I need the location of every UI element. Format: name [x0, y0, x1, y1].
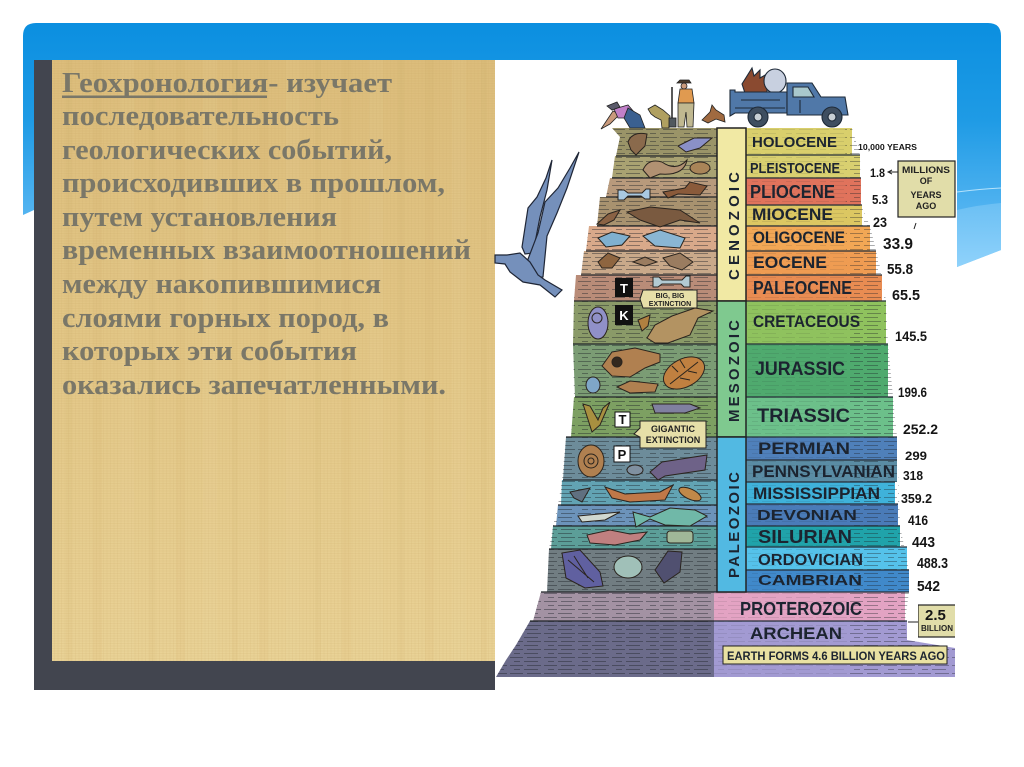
chart: geologic column, fossil side: [496, 128, 717, 677]
text block: geochronology definition: между накопившимися: [62, 269, 381, 300]
age numbers: 318: [903, 468, 923, 483]
age numbers: 359.2: [901, 491, 932, 506]
callout: 2.5 billion: [908, 605, 963, 637]
period labels: EOCENE: [753, 254, 827, 272]
callout: millions of years ago: AGO: [916, 201, 936, 211]
callout: gigantic extinction: [634, 421, 706, 448]
period labels: HOLOCENE: [752, 134, 837, 151]
age numbers: 416: [908, 512, 928, 528]
period labels: ORDOVICIAN: [758, 552, 863, 569]
period labels: [740, 134, 895, 643]
period labels: OLIGOCENE: [753, 229, 845, 247]
period labels: ARCHEAN: [750, 625, 842, 643]
marker: K boundary: [615, 305, 633, 325]
period labels: MISSISSIPPIAN: [753, 485, 880, 503]
age numbers: 145.5: [895, 328, 927, 344]
icon: standing geologist with shovel: [669, 80, 694, 127]
period labels: PLIOCENE: [750, 182, 835, 202]
era column: Mesozoic: [717, 301, 746, 437]
callout: big big extinction: [640, 290, 697, 308]
callout: big big extinction: BIG, BIG: [656, 293, 685, 300]
era column: Cenozoic: [717, 128, 746, 301]
callout: 2.5 billion: 2.5: [925, 607, 946, 624]
callout: millions of years ago: [888, 161, 955, 229]
age numbers: 488.3: [917, 555, 948, 572]
marker: P: [614, 446, 630, 462]
icon: pickup truck with fossils: [730, 68, 848, 127]
age numbers: 299: [905, 449, 927, 463]
period labels: DEVONIAN: [757, 507, 857, 524]
period labels: MIOCENE: [752, 206, 833, 224]
age numbers: 33.9: [883, 236, 913, 253]
callout: millions of years ago: OF: [920, 176, 933, 186]
icon: pterodactyl: [495, 152, 579, 297]
period labels: CAMBRIAN: [758, 572, 862, 589]
period labels: TRIASSIC: [757, 406, 850, 427]
text block: geochronology definition: оказались запечатленными.: [62, 370, 446, 401]
fossils: [562, 133, 713, 588]
age numbers: 443: [912, 534, 935, 551]
period labels: PERMIAN: [758, 440, 850, 458]
text block: geochronology definition: последовательность: [62, 101, 339, 132]
text block: geochronology definition: которых эти события: [62, 336, 357, 367]
period labels: SILURIAN: [758, 527, 852, 547]
marker: P: P: [618, 447, 627, 462]
callout: 2.5 billion: BILLION: [921, 624, 953, 633]
age numbers: 55.8: [887, 261, 913, 278]
era column: Paleozoic: PALEOZOIC: [726, 472, 743, 578]
period labels: PLEISTOCENE: [750, 160, 840, 177]
icon: kneeling geologist: [601, 102, 645, 129]
icon: dog: [648, 105, 670, 128]
age numbers: 252.2: [903, 421, 938, 437]
text block: geochronology definition: происходивших в прошлом,: [62, 168, 445, 199]
age numbers: 10,000 YEARS: [858, 143, 918, 152]
period labels: CRETACEOUS: [753, 312, 860, 331]
period labels: PROTEROZOIC: [740, 599, 862, 619]
age numbers: 65.5: [892, 287, 920, 304]
label: Earth forms: EARTH FORMS 4.6 BILLION YEARS AGO: [727, 649, 945, 663]
white picture area: [495, 60, 957, 682]
age numbers: 542: [917, 578, 940, 595]
marker: T boundary: [615, 278, 633, 297]
text block: geochronology definition: путем установления: [62, 202, 337, 233]
callout: gigantic extinction: GIGANTIC: [651, 424, 695, 434]
era column: Cenozoic: CENOZOIC: [726, 172, 743, 280]
marker: T lower: [615, 412, 630, 427]
callout: gigantic extinction: EXTINCTION: [646, 435, 700, 445]
icon: rabbit: [702, 105, 725, 123]
slide background: blue header band: [23, 23, 1001, 267]
text block: geochronology definition: слоями горных пород, в: [62, 303, 389, 334]
text block: geochronology definition: [62, 68, 471, 401]
callout: millions of years ago: MILLIONS: [902, 165, 950, 175]
period labels: PALEOCENE: [753, 278, 852, 298]
age numbers: 23: [873, 214, 887, 230]
callout: big big extinction: EXTINCTION: [649, 301, 691, 308]
age numbers: 1.8: [870, 166, 885, 180]
text block: geochronology definition: Геохронология- изучает: [62, 68, 392, 99]
period labels: JURASSIC: [755, 359, 845, 380]
marker: K boundary: K: [619, 308, 629, 323]
text block: geochronology definition: временных взаимоотношений: [62, 235, 471, 266]
marker: T boundary: T: [620, 281, 628, 296]
callout: millions of years ago: YEARS: [910, 190, 942, 200]
text block: geochronology definition: геологических событий,: [62, 135, 392, 166]
age numbers: 5.3: [872, 192, 888, 207]
chart: geologic column, coloured period bands: [714, 128, 960, 678]
era column: Mesozoic: MESOZOIC: [726, 320, 743, 422]
panel: dark frame: [34, 60, 495, 690]
age numbers: [858, 143, 948, 595]
marker: T lower: T: [619, 412, 627, 427]
period labels: PENNSYLVANIAN: [752, 463, 895, 481]
era column: Paleozoic: [717, 437, 746, 592]
age numbers: 199.6: [898, 384, 927, 400]
panel: papyrus text panel: [52, 60, 495, 661]
